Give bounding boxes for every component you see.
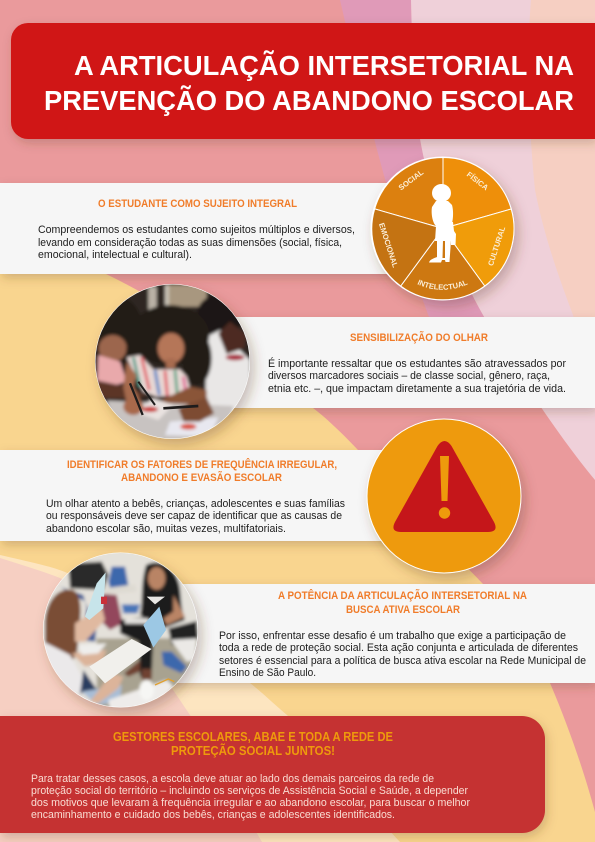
photo: family drawing together [90, 280, 255, 445]
callout: gestores escolares [0, 716, 545, 833]
heading: estudante: O ESTUDANTE COMO SUJEITO INTEGRAL [98, 198, 297, 210]
text block: sensibilização [268, 357, 566, 395]
heading: potência: A POTÊNCIA DA ARTICULAÇÃO INTERSETORIAL NA [278, 589, 527, 602]
wedge: física [443, 158, 511, 228]
callout heading: PROTEÇÃO SOCIAL JUNTOS! [171, 743, 335, 758]
text block: identificar: ou responsáveis deve ser capaz de identificar que as causas de [46, 510, 342, 522]
panel: identificar os fatores [0, 450, 400, 541]
panel: a potência da articulação [140, 584, 595, 683]
heading: sensibilização: SENSIBILIZAÇÃO DO OLHAR [350, 331, 488, 344]
text block: sensibilização: diversos marcadores sociais – de classe social, gênero, raça, [268, 370, 550, 382]
callout text [31, 773, 470, 821]
text block: potência: Ensino de São Paulo. [219, 667, 316, 679]
chart: dimensions wheel [368, 156, 525, 312]
callout heading [113, 729, 393, 758]
wedge: intelectual [401, 228, 485, 300]
heading: potência [278, 589, 527, 616]
icon: child silhouette [429, 184, 456, 262]
text block: potência: Por isso, enfrentar esse desafio é um trabalho que exige a participação de [219, 630, 566, 642]
text block: potência: toda a rede de proteção social. Esta ação conjunta e articulada de diferentes [219, 642, 578, 654]
wedge: emocional [372, 209, 443, 286]
text block: estudante: levando em consideração todas as suas dimensões (social, física, [38, 237, 342, 249]
text block: estudante: Compreendemos os estudantes como sujeitos múltiplos e diversos, [38, 224, 355, 236]
label: emocional: EMOCIONAL [377, 222, 400, 269]
icon: warning circle [367, 419, 521, 573]
exclamation mark [439, 456, 450, 519]
label: intelectual: INTELECTUAL [418, 280, 468, 290]
heading: identificar [67, 458, 337, 484]
panel: sensibilização do olhar [190, 317, 595, 408]
photo: meeting with documents [40, 545, 207, 710]
text block: sensibilização: etnia etc. –, que impactam diretamente a sua trajetória de vida. [268, 383, 566, 395]
text block: identificar: Um olhar atento a bebês, crianças, adolescentes e suas famílias [46, 498, 345, 510]
title banner [11, 23, 595, 139]
text block: identificar [46, 498, 345, 535]
callout text: Para tratar desses casos, a escola deve atuar ao lado dos demais parceiros da rede de [31, 773, 434, 785]
wedge: cultural [443, 209, 514, 286]
text block: sensibilização: É importante ressaltar que os estudantes são atravessados por [268, 357, 566, 370]
label: social: SOCIAL [397, 168, 425, 192]
callout heading: GESTORES ESCOLARES, ABAE E TODA A REDE DE [113, 729, 393, 744]
title text: PREVENÇÃO DO ABANDONO ESCOLAR [44, 85, 574, 116]
panel: o estudante como sujeito integral [0, 183, 400, 274]
text block: estudante [38, 224, 355, 261]
warning triangle [393, 441, 496, 532]
label: cultural: CULTURAL [486, 225, 507, 267]
callout text: proteção social do território – incluindo os serviços de Assistência Social e Saúde, a depender [31, 785, 468, 797]
heading: identificar: ABANDONO E EVASÃO ESCOLAR [121, 471, 282, 484]
text block: potência [219, 630, 586, 679]
title text: A ARTICULAÇÃO INTERSETORIAL NA [74, 50, 574, 81]
callout text: dos motivos que levaram à frequência irregular e ao abandono escolar, para buscar o melhor [31, 797, 470, 809]
text block: estudante: emocional, intelectual e cultural). [38, 249, 192, 261]
callout text: encaminhamento e cuidado dos bebês, crianças e adolescentes identificados. [31, 809, 395, 821]
wedge: social [375, 157, 443, 228]
heading: identificar: IDENTIFICAR OS FATORES DE FREQUÊNCIA IRREGULAR, [67, 458, 337, 471]
text block: potência: setores é essencial para a política de busca ativa escolar na Rede Municipal de [219, 655, 586, 667]
heading: potência: BUSCA ATIVA ESCOLAR [346, 604, 460, 616]
title text [44, 50, 574, 116]
label: física: FÍSICA [465, 170, 491, 193]
text block: identificar: abandono escolar são, muitas vezes, multifatoriais. [46, 523, 286, 535]
